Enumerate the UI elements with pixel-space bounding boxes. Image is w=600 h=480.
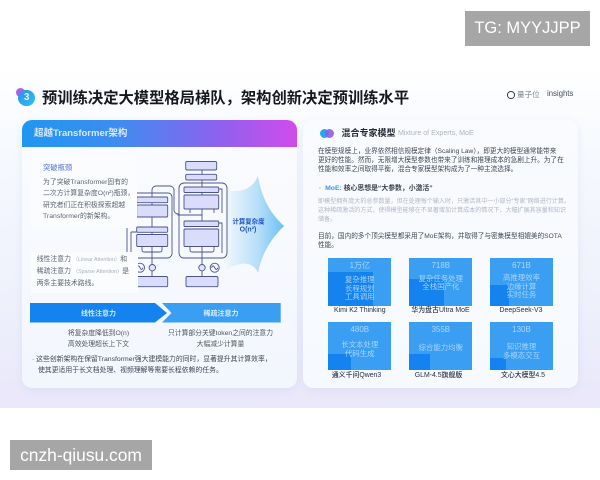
label: Huawei: 华为盘古Ultra MoE [411, 307, 470, 314]
tile: Qwen: 480B [350, 325, 369, 334]
MoE heading: 混合专家模型 Mixture of Experts, MoE [342, 128, 474, 138]
summary bullet: 使其更适用于长文档处理、视频理解等需要长程依赖的任务。 [38, 366, 223, 374]
complexity label: 计算复杂度 [233, 216, 265, 226]
callout heading: 突破瓶颈 [43, 163, 72, 172]
tile: Huawei: 复杂任务处理 [419, 274, 463, 283]
logo: 量子位 insights: insights [547, 89, 573, 98]
chevron: linear attention: 线性注意力 [81, 308, 116, 318]
transformer diagram [127, 162, 227, 287]
section number badge [16, 88, 35, 106]
linear attention notes [68, 329, 129, 348]
MoE key idea: · MoE: 核心思想是“大参数，小激活” [319, 185, 433, 192]
MoE explanation [318, 197, 570, 223]
tile: Kimi [328, 258, 391, 306]
label: ERNIE: 文心大模型4.5 [501, 372, 545, 379]
chevron: linear attention [30, 303, 167, 322]
sparse attention notes: 大幅减少计算量 [197, 340, 244, 348]
callout: two routes [31, 252, 138, 293]
logo: 量子位 insights: 量子位 [517, 90, 540, 98]
tile: ERNIE: 知识推理 [507, 342, 536, 351]
MoE icon [320, 129, 334, 138]
tile: Huawei: 718B [431, 261, 450, 270]
callout text: Transformer的新架构。 [43, 213, 114, 220]
callout: two routes: 稀疏注意力 （Sparse Attention）是 [37, 268, 129, 275]
label: DeepSeek: DeepSeek-V3 [500, 307, 542, 314]
arrow: complexity [225, 176, 284, 273]
callout: two routes: 线性注意力 （Linear Attention）和 [37, 256, 127, 263]
watermark: site: cnzh-qiusu.com [20, 445, 142, 465]
panel header [22, 120, 297, 147]
complexity label: O(n²) [240, 226, 256, 234]
logo: 量子位 insights [507, 89, 574, 99]
tile: ERNIE: 130B [512, 325, 531, 334]
panel: mixture of experts [303, 120, 578, 388]
tile: Qwen [328, 322, 391, 370]
MoE explanation: 这种稀疏激活的方式，使得模型能够在不显著增加计算成本的情况下，大幅扩展其容量和知识 [318, 208, 566, 214]
intro text: 在模型规模上，业界依然相信规模定律（Scaling Law），即更大的模型通常能带来 [318, 148, 556, 155]
sparse attention notes: 只计算部分关键token之间的注意力 [168, 330, 273, 336]
tile: DeepSeek: 671B [512, 261, 531, 270]
callout text: 为了突破Transformer固有的 [43, 179, 128, 186]
complexity label [233, 216, 265, 234]
tile: Huawei: 全栈国产化 [422, 282, 459, 291]
summary bullet: · 这些创新架构在保留Transformer强大建模能力的同时，显著提升其计算效率， [32, 356, 272, 363]
panel header: 超越Transformer架构 [34, 128, 127, 138]
panel: beyond Transformer [22, 120, 297, 388]
SOTA text: 性能。 [318, 242, 338, 249]
watermark: TG: TG: MYYJJPP [474, 19, 581, 37]
watermark: TG [465, 11, 590, 46]
tile: DeepSeek: 边缘计算 [507, 282, 536, 291]
intro text: 性能和效率之间取得平衡，混合专家模型架构成为了一种主流选择。 [318, 166, 517, 173]
linear attention notes: 高效处理超长上下文 [68, 340, 129, 348]
intro text: 更好的性能。然而，无限增大模型参数也带来了训练和推理成本的急剧上升。为了在 [318, 157, 564, 164]
tile: Kimi: 1万亿 [350, 261, 370, 270]
tile: GLM: 综合能力均衡 [419, 343, 463, 352]
tile: Qwen: 长文本处理 [341, 340, 378, 349]
tile: ERNIE [490, 322, 553, 370]
MoE explanation: 即模型拥有庞大的总参数量，但在处理每个输入时，只激活其中一小部分“专家”网络进行计算。 [318, 199, 570, 205]
tile: Kimi: 复杂推理 [345, 275, 375, 284]
tile: Qwen: 代码生成 [345, 349, 375, 358]
SOTA text [318, 232, 562, 249]
tile: ERNIE: 多模态交互 [503, 351, 540, 360]
label: Kimi: Kimi K2 Thinking [334, 307, 386, 314]
section number badge: 3 [24, 92, 29, 103]
watermark: site [10, 440, 152, 470]
MoE explanation: 储备。 [318, 217, 336, 223]
tile: GLM: 355B [431, 325, 450, 334]
tile: Huawei [409, 258, 472, 306]
intro text [318, 147, 564, 173]
label: Qwen: 通义千问Qwen3 [332, 372, 381, 379]
label: GLM: GLM-4.5旗舰版 [415, 372, 462, 379]
tile: GLM [409, 322, 472, 370]
page background [0, 68, 600, 408]
linear attention notes: 将复杂度降低到O(n) [68, 330, 129, 336]
callout: breakthrough bottleneck [31, 157, 137, 228]
callout: two routes: 两条主要技术路线。 [37, 280, 98, 287]
chevron: sparse attention [162, 303, 281, 322]
sparse attention notes [168, 329, 273, 348]
title: 预训练决定大模型格局梯队，架构创新决定预训练水平 [42, 90, 409, 107]
tile: Kimi: 长程规划 [345, 284, 375, 293]
tile: Kimi: 工具调用 [345, 292, 375, 301]
callout text: 研究者们正在积极探索超越 [43, 202, 125, 209]
callout text: 二次方计算复杂度O(n²)瓶颈， [43, 190, 134, 197]
callout text [43, 178, 134, 220]
summary bullet [32, 355, 272, 374]
chevron: sparse attention: 稀疏注意力 [204, 308, 238, 318]
tile: DeepSeek: 高推理效率 [503, 273, 540, 282]
SOTA text: 目前，国内的多个顶尖模型都采用了MoE架构，并取得了与密集模型相媲美的SOTA [318, 233, 562, 240]
tile: DeepSeek [490, 258, 553, 306]
tile: DeepSeek: 实时任务 [507, 290, 536, 299]
